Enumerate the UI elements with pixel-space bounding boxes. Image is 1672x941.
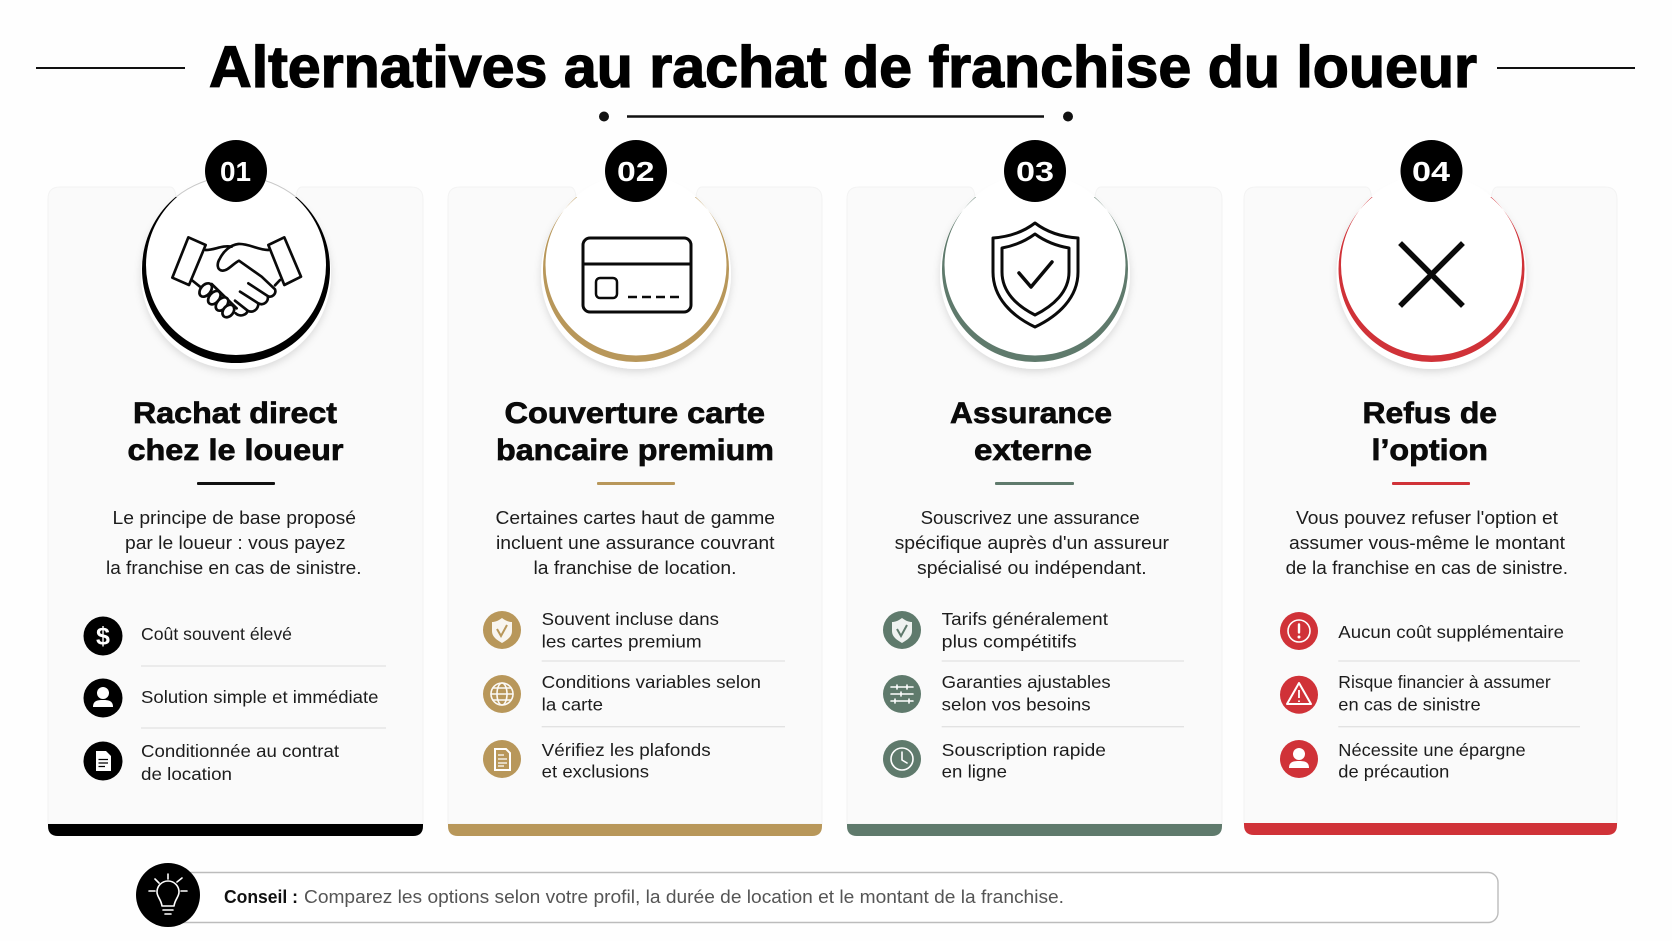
list: option 03 points: en ligne <box>942 762 1007 782</box>
description: la franchise en cas de sinistre. <box>106 557 362 578</box>
icon: light bulb <box>136 863 200 927</box>
heading <box>496 397 774 485</box>
description: Le principe de base proposé <box>112 507 356 528</box>
description: la franchise de location. <box>534 557 736 578</box>
heading <box>128 397 344 485</box>
list: option 01 points <box>84 616 386 784</box>
list: option 01 points: de location <box>141 764 232 784</box>
description: Souscrivez une assurance <box>921 507 1140 528</box>
list: option 03 points: Souscription rapide <box>942 740 1106 760</box>
list: option 03 points: Tarifs généralement <box>942 609 1108 629</box>
list: option 02 points: Vérifiez les plafonds <box>542 740 711 760</box>
icon: person <box>1280 740 1318 778</box>
description: par le loueur : vous payez <box>125 532 346 553</box>
panel: option 03 assurance externe <box>847 140 1222 836</box>
bottom accent bar <box>48 824 423 836</box>
list: option 03 points <box>883 609 1184 782</box>
icon: person <box>84 678 122 718</box>
list: option 02 points: Souvent incluse dans <box>542 609 719 629</box>
icon: warning triangle <box>1280 676 1318 714</box>
icon: cross in circle <box>1336 174 1526 369</box>
number badge 03: 03 <box>1016 156 1054 187</box>
icon: dollar <box>84 616 122 656</box>
description: de la franchise en cas de sinistre. <box>1286 557 1568 578</box>
list: option 01 points: Coût souvent élevé <box>141 624 292 644</box>
list: option 04 points: en cas de sinistre <box>1338 695 1481 715</box>
title <box>36 35 1635 122</box>
heading: chez le loueur <box>128 434 344 467</box>
panel: option 01 rachat direct <box>48 140 423 836</box>
list: option 04 points <box>1280 612 1580 782</box>
number badge 02 <box>605 140 667 202</box>
bottom accent bar <box>847 824 1222 836</box>
heading <box>1362 397 1497 485</box>
title: Alternatives au rachat de franchise du loueur <box>209 35 1477 100</box>
panel: option 02 carte bancaire <box>448 140 822 836</box>
number badge 01: 01 <box>220 156 251 187</box>
heading: bancaire premium <box>496 434 774 467</box>
list: option 02 points: les cartes premium <box>542 632 702 652</box>
icon: handshake in circle <box>140 174 332 369</box>
list: option 04 points: Nécessite une épargne <box>1338 740 1526 760</box>
bottom accent bar <box>448 824 822 836</box>
description: incluent une assurance couvrant <box>496 532 774 553</box>
tip text: Comparez les options selon votre profil, la durée de location et le montant de la franchise. <box>304 886 1064 907</box>
icon: dollar: $ <box>96 622 110 650</box>
description: spécialisé ou indépendant. <box>917 557 1147 578</box>
panel: option 04 refus de l'option <box>1244 140 1617 835</box>
heading <box>950 397 1112 485</box>
description <box>106 507 362 578</box>
number badge 03 <box>1004 140 1066 202</box>
list: option 04 points: de précaution <box>1338 762 1449 782</box>
list: option 03 points: Garanties ajustables <box>942 672 1111 692</box>
icon: clock <box>883 740 921 778</box>
icon: shield check <box>483 611 521 649</box>
heading: Couverture carte <box>504 397 765 430</box>
icon: document <box>84 742 122 780</box>
list: option 04 points: Aucun coût supplémentaire <box>1338 622 1564 642</box>
description: Vous pouvez refuser l'option et <box>1296 507 1558 528</box>
tip text: Conseil : <box>224 886 298 907</box>
list: option 03 points: selon vos besoins <box>942 695 1091 715</box>
list: option 02 points: la carte <box>542 695 603 715</box>
list: option 02 points: Conditions variables selon <box>542 672 761 692</box>
icon: document <box>483 740 521 778</box>
heading: Assurance <box>950 397 1112 430</box>
list: option 04 points: Risque financier à assumer <box>1338 672 1551 692</box>
list: option 01 points: Conditionnée au contrat <box>141 741 339 761</box>
heading: l’option <box>1372 434 1488 467</box>
description: spécifique auprès d'un assureur <box>895 532 1169 553</box>
description: Certaines cartes haut de gamme <box>496 507 775 528</box>
number badge 02: 02 <box>617 156 654 187</box>
icon: shield check <box>883 611 921 649</box>
number badge 04 <box>1400 140 1462 202</box>
description <box>895 507 1169 578</box>
bottom accent bar <box>1244 823 1617 835</box>
icon: exclamation <box>1280 612 1318 650</box>
icon: shield in circle <box>940 174 1130 369</box>
description: assumer vous-même le montant <box>1289 532 1565 553</box>
heading: Rachat direct <box>133 397 337 430</box>
list: option 01 points: Solution simple et immédiate <box>141 687 378 707</box>
list: option 02 points <box>483 609 785 782</box>
heading: Refus de <box>1362 397 1497 430</box>
description <box>496 507 775 578</box>
heading: externe <box>974 434 1092 467</box>
list: option 03 points: plus compétitifs <box>942 632 1077 652</box>
number badge 01 <box>205 140 267 202</box>
callout: conseil <box>136 863 1498 927</box>
description <box>1286 507 1568 578</box>
icon: sliders <box>883 675 921 713</box>
icon: globe <box>483 675 521 713</box>
icon: credit card in circle <box>541 174 731 369</box>
list: option 02 points: et exclusions <box>542 762 649 782</box>
number badge 04: 04 <box>1412 156 1451 187</box>
